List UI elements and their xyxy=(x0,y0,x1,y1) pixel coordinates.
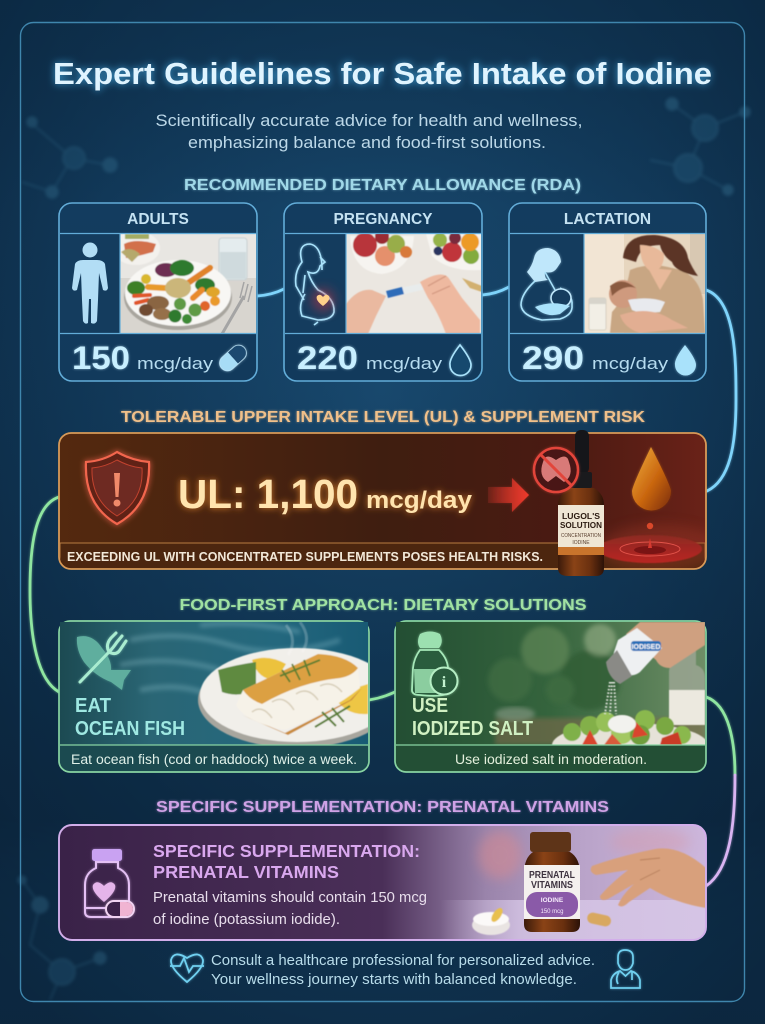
icon: person xyxy=(72,242,108,324)
prenatal vitamins bottle: 150 mcg xyxy=(540,909,564,915)
panel: upper intake level xyxy=(59,430,720,576)
heading: food-first: FOOD-FIRST APPROACH: DIETARY SOLUTIONS xyxy=(180,597,587,614)
lactation photo xyxy=(584,234,705,333)
prenatal body text xyxy=(153,890,427,928)
connector: green to purple path xyxy=(706,697,735,886)
prenatal vitamins bottle xyxy=(524,832,580,932)
droplet and ripple xyxy=(598,447,702,563)
connector: green path xyxy=(30,497,395,700)
pregnancy label: PREGNANCY xyxy=(333,211,433,228)
molecule decoration: top left xyxy=(22,117,117,198)
Lugol's solution bottle: SOLUTION xyxy=(560,520,602,530)
heading: RDA: RECOMMENDED DIETARY ALLOWANCE (RDA) xyxy=(184,177,581,194)
panel: iodized salt xyxy=(395,621,708,772)
icon: thyroid prohibition xyxy=(534,448,578,492)
icon: outlined water drop xyxy=(450,345,471,376)
fish caption: Eat ocean fish (cod or haddock) twice a week. xyxy=(71,752,357,767)
UL value xyxy=(178,471,473,517)
panel: prenatal vitamins xyxy=(59,825,706,940)
ocean fish photo xyxy=(60,622,368,744)
iodized salt photo: IODISED xyxy=(632,644,660,651)
UL value: UL: 1,100 xyxy=(178,471,358,517)
salt caption: Use iodized salt in moderation. xyxy=(455,752,647,767)
adults value: 150 xyxy=(72,340,130,376)
subtitle: emphasizing balance and food-first solutions. xyxy=(188,134,546,152)
icon: warning shield xyxy=(86,452,149,524)
panel: lactation xyxy=(509,203,706,381)
closing note: Consult a healthcare professional for personalized advice. xyxy=(211,953,595,969)
prenatal body text: Prenatal vitamins should contain 150 mcg xyxy=(153,890,427,906)
icon: capsule xyxy=(217,342,249,374)
Lugol's solution bottle: CONCENTRATION xyxy=(561,533,601,539)
pregnancy icon column xyxy=(285,234,346,333)
pregnancy value: 220 xyxy=(297,340,358,376)
prenatal heading xyxy=(153,841,420,882)
adults food photo xyxy=(112,231,256,334)
lactation icon column xyxy=(510,234,584,333)
icon: salt shaker: i xyxy=(442,674,447,691)
lactation value: mcg/day xyxy=(592,354,669,373)
lactation value: 290 xyxy=(522,340,584,376)
heading: supplementation: SPECIFIC SUPPLEMENTATION: PRENATAL VITAMINS xyxy=(156,799,609,816)
subtitle xyxy=(156,112,582,152)
adults person column xyxy=(60,234,120,333)
molecule decoration: bottom left xyxy=(18,876,106,1000)
Lugol's solution bottle: IODINE xyxy=(572,540,590,546)
lactation value xyxy=(522,340,669,376)
prenatal vitamins bottle: IODINE xyxy=(541,897,564,904)
closing note: Your wellness journey starts with balanced knowledge. xyxy=(211,972,577,988)
molecule decoration: top right xyxy=(650,98,750,195)
UL value: mcg/day xyxy=(366,487,473,514)
salt heading xyxy=(412,695,533,740)
adults value xyxy=(72,340,214,376)
fish heading xyxy=(75,695,185,740)
prenatal photo xyxy=(440,828,706,940)
icon: doctor xyxy=(611,950,640,988)
salt heading: IODIZED SALT xyxy=(412,718,533,740)
arrow xyxy=(488,478,529,512)
icon: pregnant woman xyxy=(296,244,334,325)
icon: fish and fork xyxy=(77,633,131,690)
fish heading: EAT xyxy=(75,695,111,717)
warning text: EXCEEDING UL WITH CONCENTRATED SUPPLEMENTS POSES HEALTH RISKS. xyxy=(67,549,543,564)
pregnancy value: mcg/day xyxy=(366,354,443,373)
adults value: mcg/day xyxy=(137,354,214,373)
salt heading: USE xyxy=(412,695,448,717)
prenatal body text: of iodine (potassium iodide). xyxy=(153,912,340,928)
iodized salt photo xyxy=(396,622,705,744)
panel: ocean fish xyxy=(59,621,394,772)
connector: blue path xyxy=(257,287,736,491)
icon: filled water drop xyxy=(675,345,696,376)
icon: heart with pulse xyxy=(170,954,204,982)
prenatal heading: SPECIFIC SUPPLEMENTATION: xyxy=(153,841,420,861)
adults label: ADULTS xyxy=(127,211,189,228)
prenatal vitamins bottle: PRENATAL xyxy=(529,870,575,881)
panel: adults xyxy=(59,203,257,381)
Lugol's solution bottle: LUGOL'S xyxy=(562,511,600,521)
warning strip xyxy=(60,543,705,569)
icon: salt shaker xyxy=(412,632,458,696)
title: Expert Guidelines for Safe Intake of Iodine xyxy=(53,56,712,91)
panel: pregnancy xyxy=(284,203,482,381)
prenatal vitamins bottle: VITAMINS xyxy=(531,880,573,891)
fish heading: OCEAN FISH xyxy=(75,718,185,740)
subtitle: Scientifically accurate advice for health and wellness, xyxy=(156,112,582,130)
icon: vitamin bottle with heart xyxy=(85,849,134,917)
Lugol's solution bottle xyxy=(558,430,604,576)
prenatal heading: PRENATAL VITAMINS xyxy=(153,862,339,882)
heading: UL: TOLERABLE UPPER INTAKE LEVEL (UL) & SUPPLEMENT RISK xyxy=(121,409,645,426)
closing note xyxy=(211,953,595,988)
pregnancy photo xyxy=(346,230,482,334)
pregnancy value xyxy=(297,340,443,376)
icon: breastfeeding mother xyxy=(521,248,572,320)
lactation label: LACTATION xyxy=(564,211,651,228)
